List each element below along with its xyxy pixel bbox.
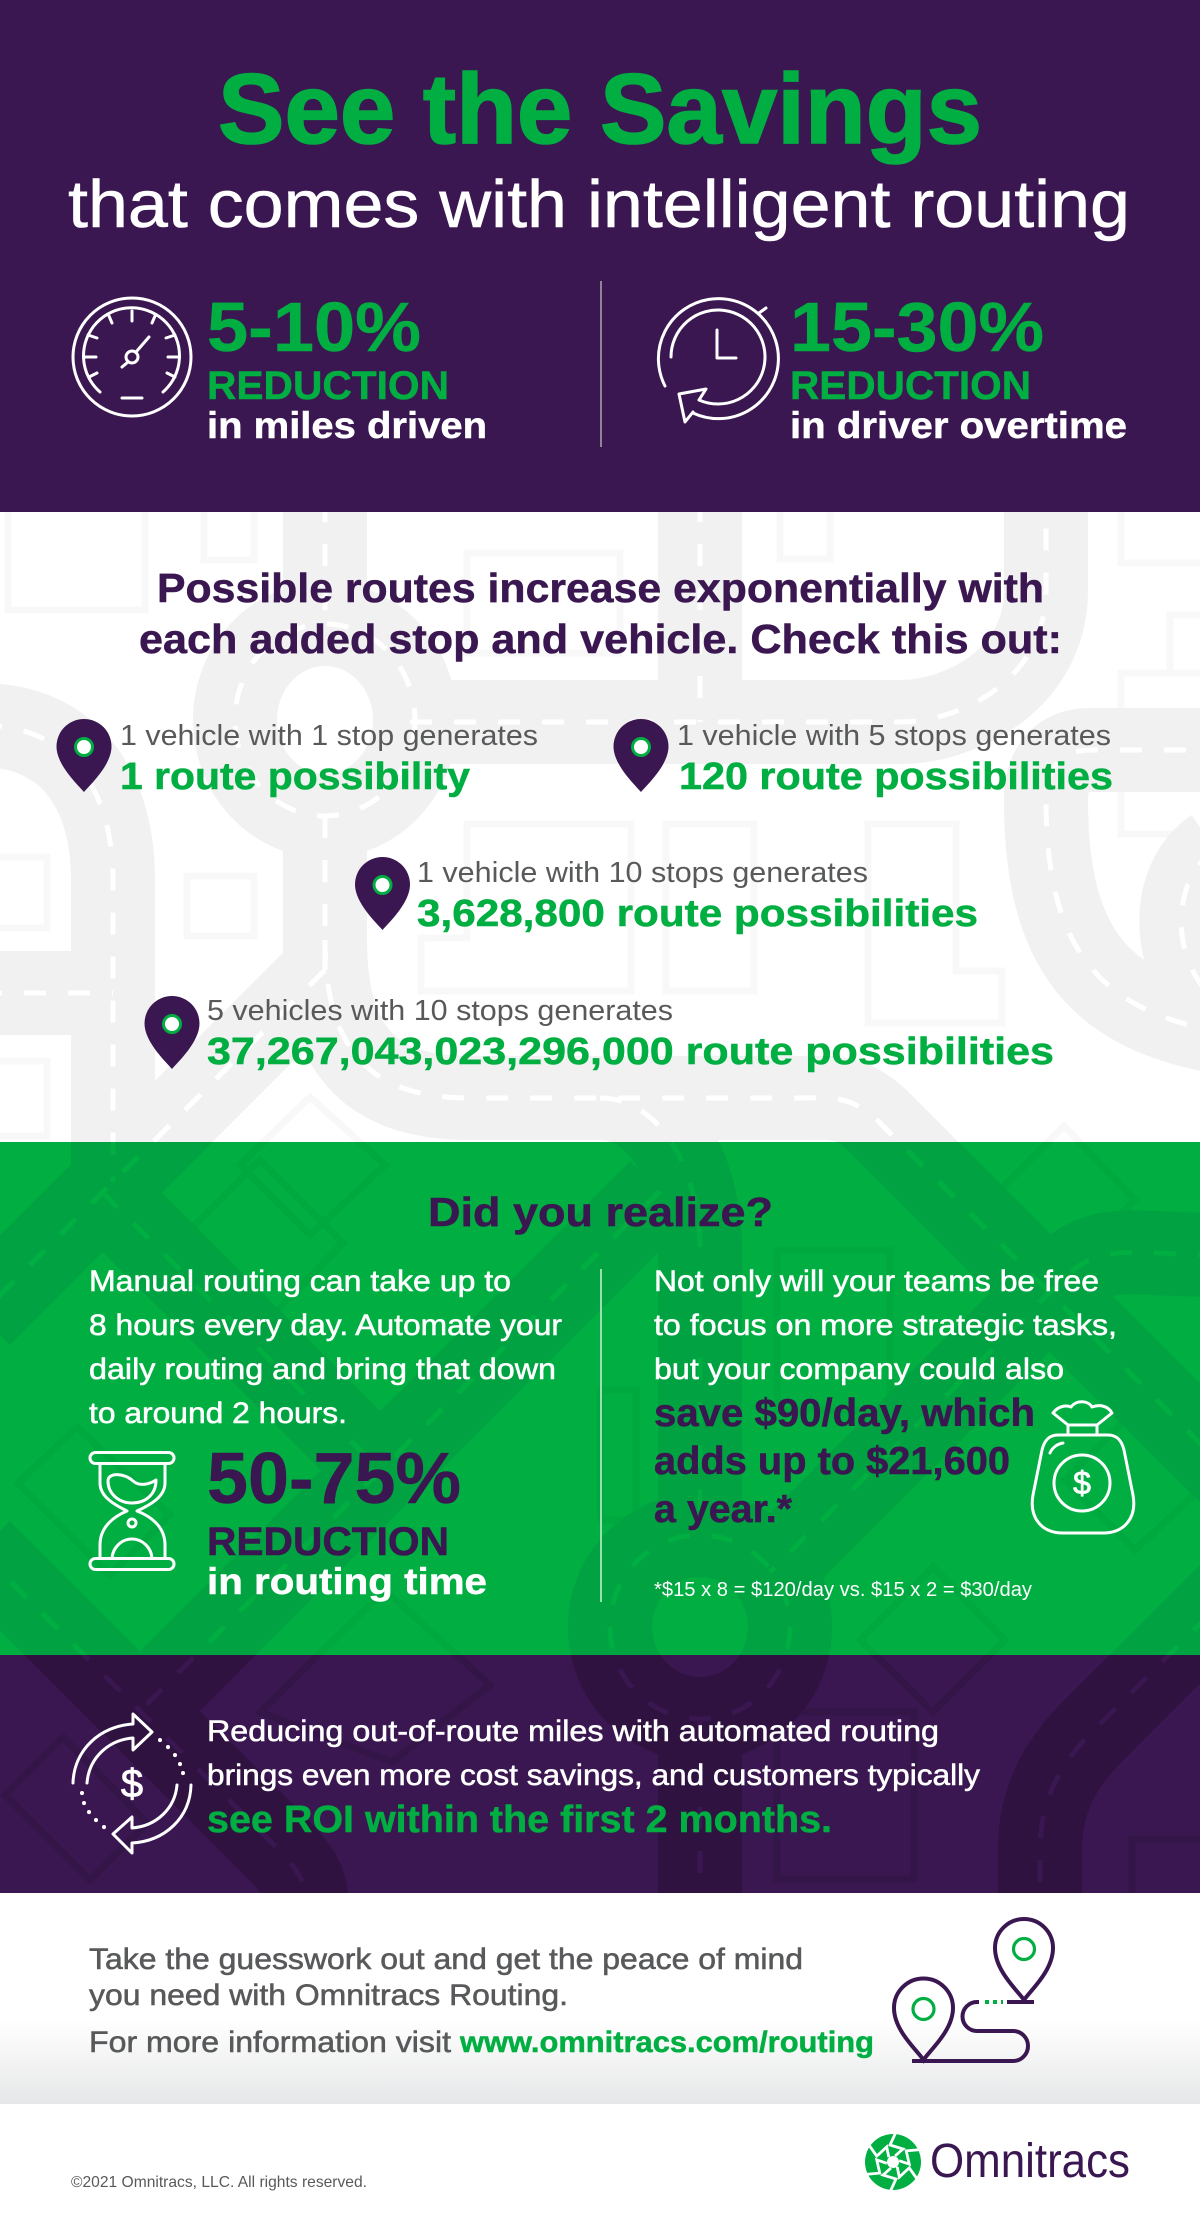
text: manual routing: daily routing and bring that down — [89, 1353, 556, 1386]
panel: did you realize — [0, 1142, 1200, 1655]
panel: header — [0, 0, 1200, 512]
item: 1 vehicle 5 stops — [677, 720, 1113, 798]
text: strategic tasks — [654, 1265, 1117, 1386]
text: call to action — [89, 1943, 874, 2059]
item: 1 vehicle 10 stops: 3,628,800 route possibilities — [417, 893, 978, 935]
stat: driver overtime: 15-30% — [790, 288, 1044, 366]
text: manual routing: to around 2 hours. — [89, 1397, 347, 1430]
icon: pin 2 — [614, 719, 668, 792]
stat: driver overtime: REDUCTION — [790, 364, 1031, 408]
title: See the Savings — [218, 53, 982, 164]
subtitle: that comes with intelligent routing — [68, 167, 1130, 242]
item: 5 vehicles 10 stops: 5 vehicles with 10 stops generates — [207, 995, 673, 1027]
item: 1 vehicle 10 stops — [417, 857, 978, 935]
text: savings callout — [654, 1392, 1035, 1531]
copyright: ©2021 Omnitracs, LLC. All rights reserved. — [71, 2174, 367, 2191]
panel: route possibilities — [0, 512, 1200, 1142]
icon: clock with return arrow — [658, 299, 778, 422]
text: call to action: www.omnitracs.com/routing — [459, 2026, 874, 2059]
icon: dollar cycle — [73, 1714, 191, 1853]
text: strategic tasks: Not only will your teams be free — [654, 1265, 1099, 1298]
heading: possible routes — [139, 565, 1062, 662]
text: call to action: Take the guesswork out and get the peace of mind — [89, 1943, 803, 1976]
text: call to action: For more information visit — [89, 2026, 451, 2059]
text: manual routing: Manual routing can take up to — [89, 1265, 511, 1298]
text: manual routing: 8 hours every day. Automate your — [89, 1309, 562, 1342]
panel: ROI — [0, 1655, 1200, 1893]
icon: route between pins — [894, 1919, 1053, 2061]
icon: logo mark — [862, 2132, 924, 2192]
logo: Omnitracs: Omnitracs — [930, 2135, 1130, 2188]
text: strategic tasks: but your company could also — [654, 1353, 1064, 1386]
icon: money bag: $ — [1073, 1465, 1091, 1501]
item: 1 vehicle 10 stops: 1 vehicle with 10 stops generates — [417, 857, 868, 889]
text: ROI message — [207, 1715, 980, 1841]
text: ROI message: see ROI within the first 2 months. — [207, 1799, 832, 1841]
text: savings callout: a year.* — [654, 1488, 793, 1531]
text: savings callout: save $90/day, which — [654, 1392, 1035, 1435]
stat: driver overtime — [790, 288, 1127, 446]
text: ROI message: brings even more cost savings, and customers typically — [207, 1759, 980, 1792]
stat: miles driven: 5-10% — [207, 288, 421, 366]
icon: dollar cycle: $ — [121, 1762, 143, 1806]
item: 1 vehicle 1 stop: 1 vehicle with 1 stop generates — [120, 720, 538, 752]
icon: speedometer — [73, 298, 191, 416]
panel: footer — [0, 2104, 1200, 2220]
stat: routing time: 50-75% — [207, 1439, 461, 1519]
panel: call to action — [0, 1893, 1200, 2104]
stat: routing time: in routing time — [207, 1561, 487, 1602]
icon: pin 1 — [56, 719, 112, 792]
icon: pin 3 — [355, 857, 410, 930]
item: 1 vehicle 1 stop — [120, 720, 538, 798]
heading: did you realize: Did you realize? — [428, 1189, 773, 1235]
item: 5 vehicles 10 stops — [207, 995, 1054, 1073]
stat: miles driven: in miles driven — [207, 405, 487, 446]
item: 1 vehicle 1 stop: 1 route possibility — [120, 756, 470, 798]
item: 1 vehicle 5 stops: 120 route possibilities — [679, 756, 1113, 798]
stat: routing time: REDUCTION — [207, 1520, 449, 1564]
item: 1 vehicle 5 stops: 1 vehicle with 5 stops generates — [677, 720, 1111, 752]
text: savings callout: adds up to $21,600 — [654, 1440, 1010, 1483]
icon: money bag — [1032, 1402, 1134, 1533]
text: strategic tasks: to focus on more strategic tasks, — [654, 1309, 1117, 1342]
icon: hourglass — [90, 1452, 174, 1570]
stat: routing time — [207, 1439, 487, 1602]
icon: pin 4 — [144, 996, 200, 1069]
footnote: *$15 x 8 = $120/day vs. $15 x 2 = $30/day — [654, 1579, 1032, 1601]
heading: possible routes: each added stop and vehicle. Check this out: — [139, 616, 1062, 662]
text: call to action: you need with Omnitracs Routing. — [89, 1979, 568, 2012]
stat: driver overtime: in driver overtime — [790, 405, 1127, 446]
item: 5 vehicles 10 stops: 37,267,043,023,296,000 route possibilities — [207, 1031, 1054, 1073]
text: manual routing — [89, 1265, 562, 1430]
stat: miles driven: REDUCTION — [207, 364, 449, 408]
logo: Omnitracs — [862, 2132, 1130, 2192]
text: ROI message: Reducing out-of-route miles with automated routing — [207, 1715, 939, 1748]
stat: miles driven — [207, 288, 487, 446]
heading: possible routes: Possible routes increase exponentially with — [157, 565, 1044, 611]
